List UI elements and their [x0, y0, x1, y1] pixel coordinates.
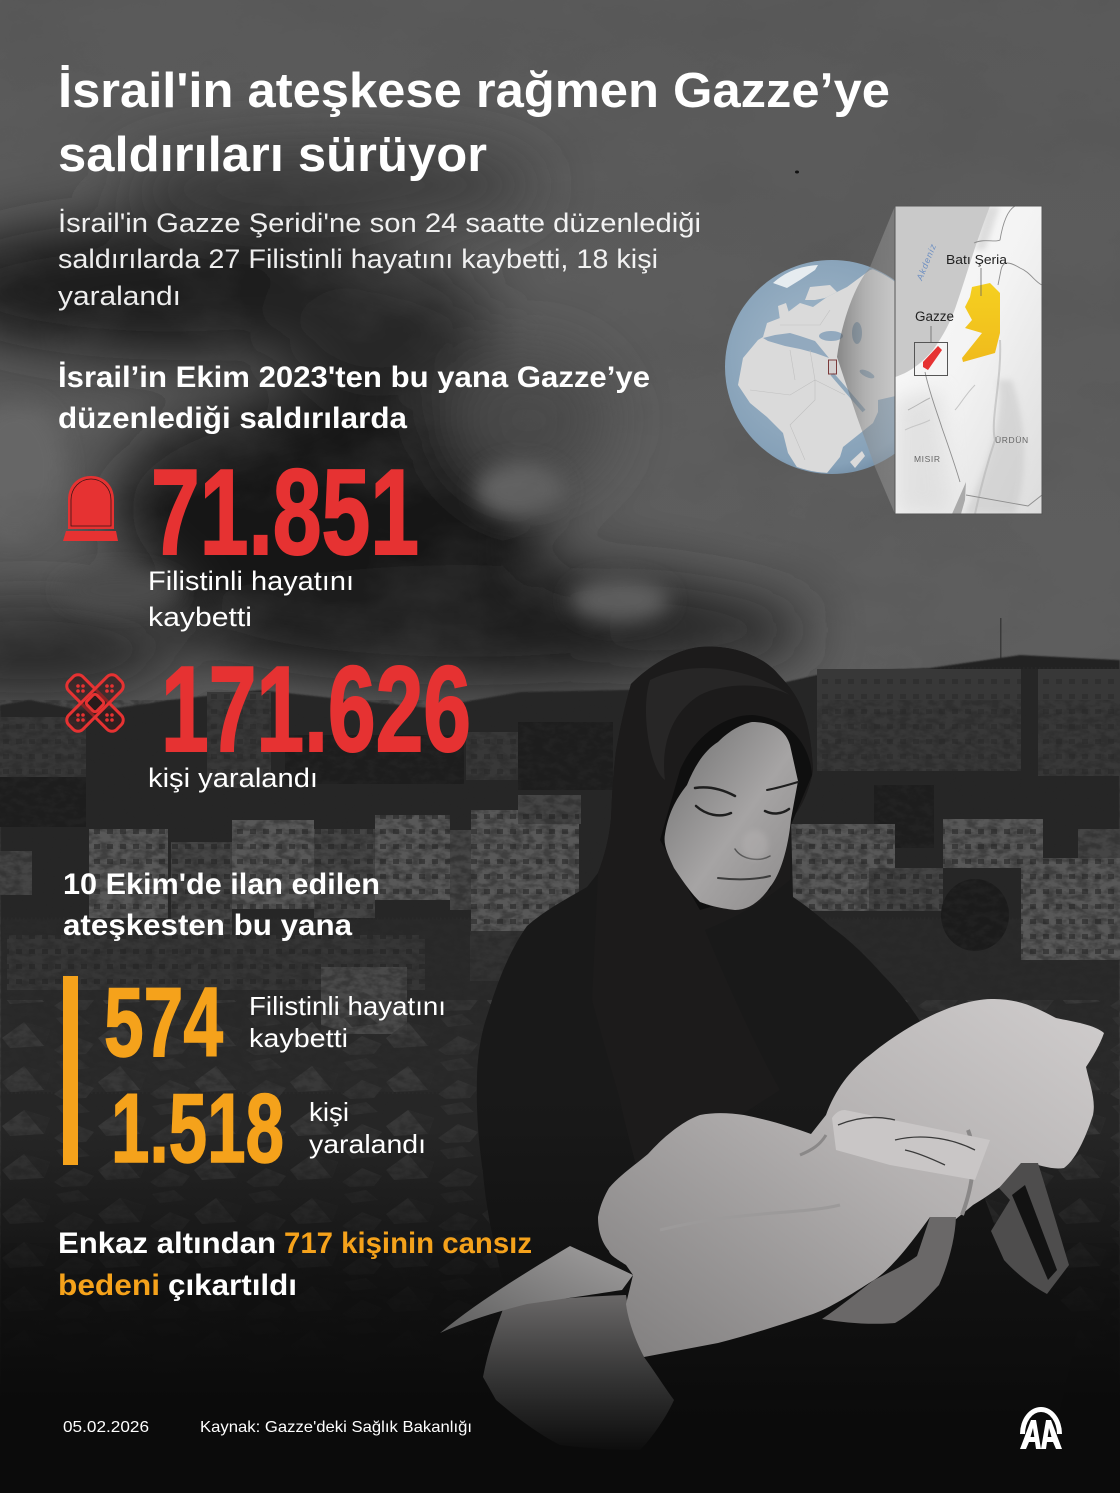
stat: deaths since 2023: 71.851	[151, 444, 419, 580]
tent camp	[2, 1000, 1120, 1254]
callout: bodies recovered from rubble: 717 kişinin cansız	[284, 1227, 532, 1260]
cloth tail	[440, 1246, 633, 1333]
lower cloth fading into shadow	[483, 1295, 674, 1450]
intro paragraph: İsrail'in Gazze Şeridi'ne son 24 saatte düzenlediği	[58, 207, 701, 238]
Britain	[778, 303, 788, 318]
map panel: Akdeniz	[914, 242, 938, 283]
globe	[725, 260, 894, 474]
map labels: Batı Şeria	[946, 252, 1008, 267]
section heading: since the ceasefire: 10 Ekim'de ilan edilen	[63, 868, 380, 901]
Mediterranean and other seas	[763, 333, 829, 358]
title: saldırıları sürüyor	[58, 128, 487, 182]
terrain shading	[895, 390, 950, 514]
Gulf of Aqaba	[952, 482, 966, 514]
stat: deaths since ceasefire: 574	[104, 967, 223, 1077]
icon: gravestone	[63, 476, 118, 541]
callout: bodies recovered from rubble	[58, 1227, 532, 1302]
under-scarf around the face	[660, 715, 812, 910]
callout: bodies recovered from rubble: Enkaz altından	[58, 1227, 276, 1260]
photo: grieving woman holding a shrouded child	[440, 647, 1104, 1450]
bottom fade	[0, 1130, 1120, 1400]
callout: bodies recovered from rubble: çıkartıldı	[168, 1269, 297, 1302]
smoke clouds	[0, 145, 810, 700]
dark distant buildings	[0, 669, 1120, 788]
nose highlight	[742, 830, 768, 860]
map panel: MISIR	[914, 454, 941, 464]
body and hijab	[477, 647, 1080, 1420]
zoom cone	[837, 206, 895, 514]
borders	[925, 206, 1042, 506]
handwritten note on cloth	[832, 1110, 990, 1180]
facial features	[695, 782, 798, 879]
section heading: since the ceasefire	[63, 868, 380, 942]
face	[665, 722, 798, 910]
accent bar	[63, 976, 78, 1165]
map panel	[895, 206, 1042, 514]
footer date: 05.02.2026	[63, 1419, 149, 1436]
title: İsrail'in ateşkese rağmen Gazze’ye	[58, 64, 890, 118]
right hand and phone	[991, 1163, 1069, 1294]
collapsed concrete block and walls	[7, 935, 425, 990]
stat: injured since 2023: kişi yaralandı	[148, 763, 318, 793]
section heading: since October 2023: İsrail’in Ekim 2023'ten bu yana Gazze’ye	[58, 361, 650, 394]
stat: injured since 2023: 171.626	[161, 641, 471, 777]
section heading: since October 2023: düzenlediği saldırılarda	[58, 402, 407, 435]
globe marker	[828, 360, 836, 374]
map panel: ÜRDÜN	[995, 435, 1029, 445]
stat: injured since ceasefire: kişi	[309, 1097, 349, 1127]
section heading: since the ceasefire: ateşkesten bu yana	[63, 909, 352, 942]
footer source: Kaynak: Gazze'deki Sağlık Bakanlığı	[200, 1419, 472, 1436]
leader lines	[931, 268, 981, 342]
hijab outer layer	[592, 647, 813, 1180]
tree	[941, 879, 1009, 951]
stat: injured since ceasefire: 1.518	[111, 1073, 284, 1183]
stat: deaths since 2023	[148, 444, 419, 632]
light cloud puffs	[0, 400, 670, 622]
city base	[0, 655, 1120, 1400]
mid-distance apartment blocks	[89, 810, 1120, 960]
rubble grain	[0, 700, 1120, 1350]
Madagascar	[850, 451, 865, 468]
continents	[738, 262, 900, 473]
antenna and distant speck	[1000, 618, 1002, 668]
hijab top fold	[646, 668, 790, 780]
stat: injured since ceasefire: yaralandı	[309, 1129, 426, 1159]
title	[58, 64, 890, 182]
national borders	[750, 310, 845, 460]
stat: injured since 2023	[148, 641, 471, 793]
shrouded child	[598, 999, 1104, 1357]
section heading: since October 2023	[58, 361, 650, 435]
Gaza box	[914, 342, 948, 376]
map panel: Gazze	[915, 309, 954, 324]
intro paragraph: yaralandı	[58, 281, 181, 311]
West Bank	[962, 283, 1000, 362]
icon: AA logo	[1020, 1407, 1062, 1449]
Gaza Strip	[923, 346, 942, 370]
intro paragraph: saldırılarda 27 Filistinli hayatını kaybetti, 18 kişi	[58, 244, 658, 274]
cloud texture	[0, 0, 1120, 720]
relief lines	[905, 340, 1000, 514]
map frame	[895, 206, 1042, 514]
intro paragraph	[58, 207, 701, 311]
locator globe and map	[725, 206, 1042, 514]
stat: deaths since ceasefire: Filistinli hayatını	[249, 991, 446, 1021]
stat: deaths since ceasefire: kaybetti	[249, 1023, 348, 1053]
Greenland ice	[773, 265, 818, 288]
Scandinavia	[805, 285, 837, 300]
icon: crossed bandages	[64, 672, 126, 734]
stat: deaths since 2023: kaybetti	[148, 602, 252, 632]
callout: bodies recovered from rubble: bedeni	[58, 1269, 160, 1302]
sea	[895, 206, 990, 377]
left hand	[822, 1217, 956, 1324]
stat: deaths since ceasefire	[104, 967, 446, 1077]
stat: deaths since 2023: Filistinli hayatını	[148, 566, 354, 596]
cloth tie and shadow	[660, 1130, 973, 1230]
